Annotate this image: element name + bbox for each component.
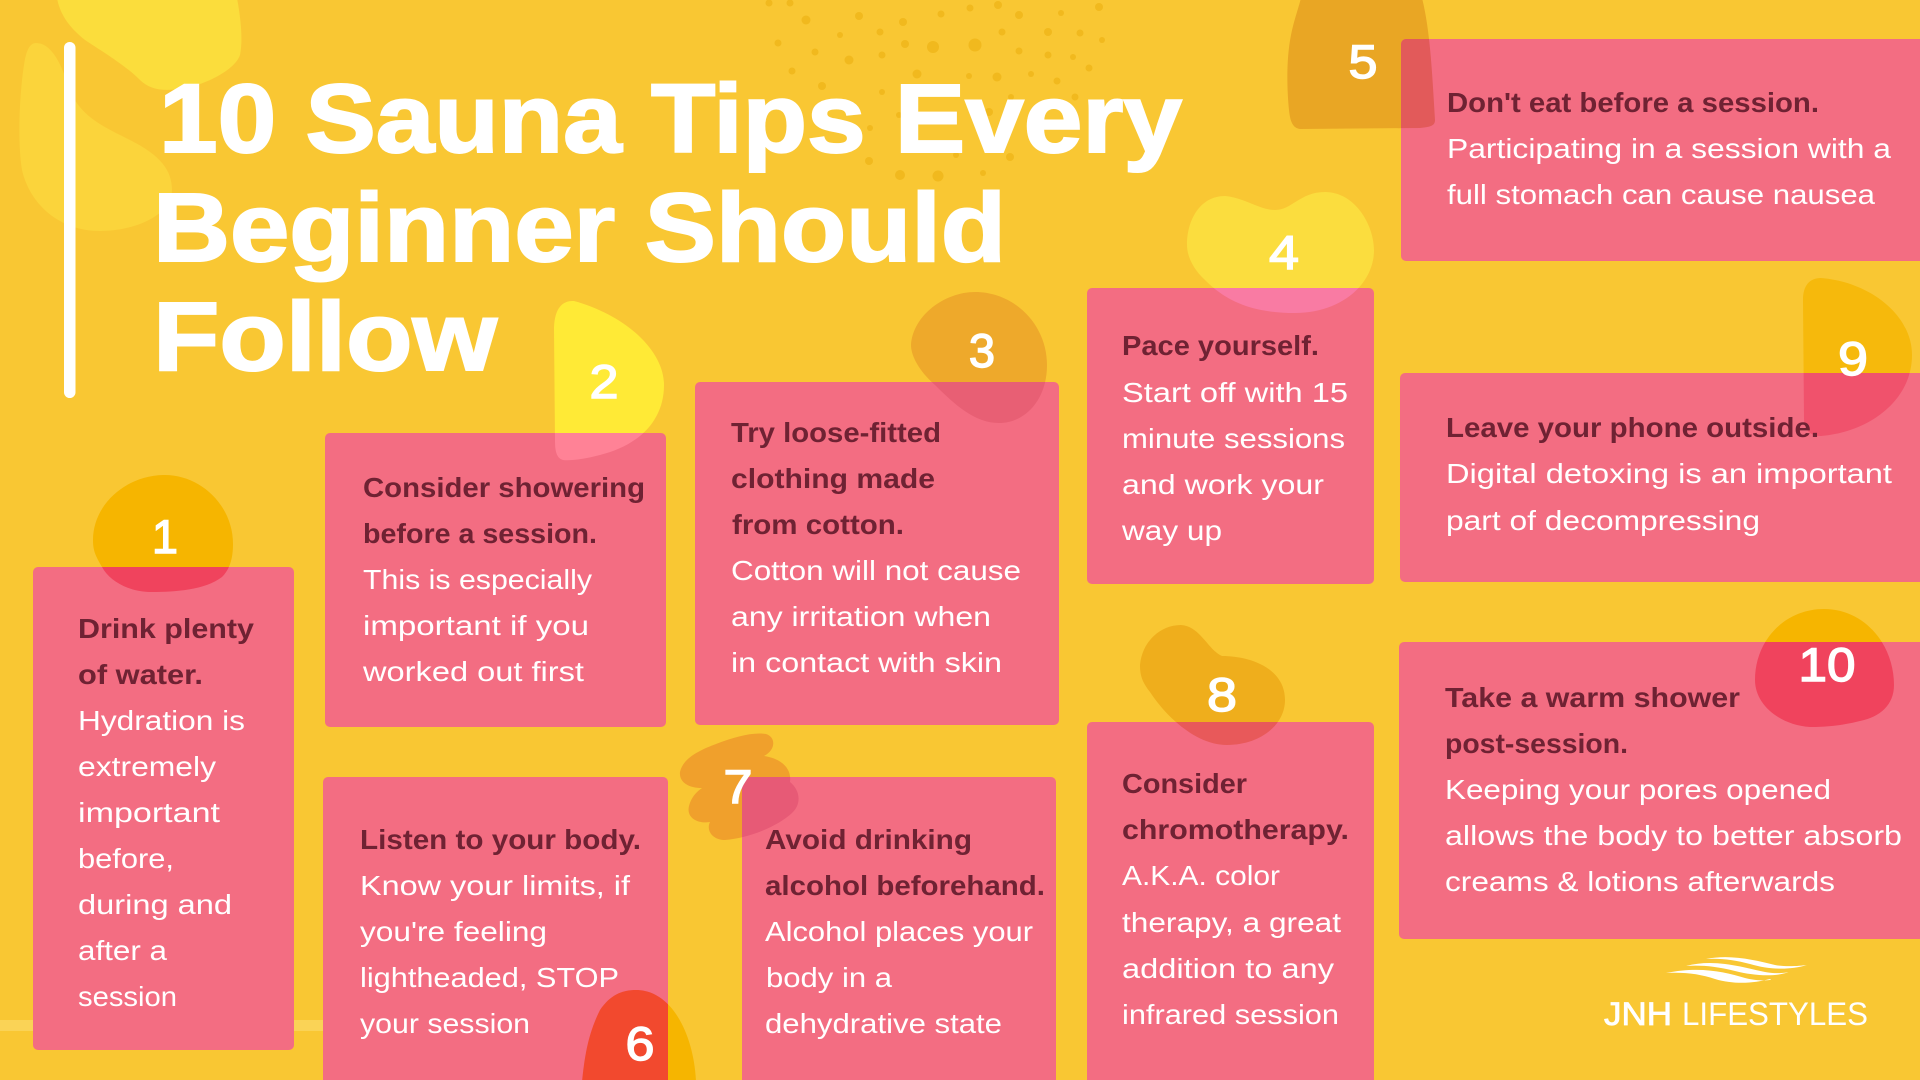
- panel: tip 8: therapy, a great: [1122, 907, 1341, 938]
- panel: tip 3: in contact with skin: [731, 647, 1002, 678]
- panel: tip 3: from cotton.: [732, 509, 904, 540]
- panel: tip 3: Try loose-fitted: [731, 417, 941, 448]
- panel: tip 5: full stomach can cause nausea: [1447, 179, 1875, 210]
- panel: tip 2: worked out first: [362, 656, 584, 687]
- panel: tip 1: [33, 475, 294, 1050]
- panel: tip 3: Cotton will not cause: [731, 555, 1021, 586]
- panel: tip 2: important if you: [363, 610, 589, 641]
- panel: tip 4: minute sessions: [1122, 423, 1345, 454]
- panel: tip 6: [323, 777, 696, 1080]
- panel: tip 4: [1087, 192, 1374, 584]
- panel: tip 1: important: [78, 797, 220, 828]
- panel: tip 9: Digital detoxing is an important: [1446, 458, 1892, 489]
- title: 10 Sauna Tips Every: [159, 64, 1182, 173]
- panel: tip 8: A.K.A. color: [1122, 860, 1280, 891]
- panel: tip 10: post-session.: [1445, 728, 1628, 759]
- panel: tip 9: 9: [1838, 332, 1868, 385]
- panel: tip 5: 5: [1348, 35, 1378, 88]
- decorative blob: top left yellow: [57, 0, 241, 90]
- logo: JNH Lifestyles: LIFESTYLES: [1682, 996, 1868, 1032]
- panel: tip 1: after a: [78, 935, 167, 966]
- panel: tip 3: clothing made: [731, 463, 935, 494]
- panel: tip 2: before a session.: [363, 518, 597, 549]
- panel: tip 1: of water.: [78, 659, 203, 690]
- decorative dot pattern: [766, 0, 1105, 182]
- panel: tip 6: Know your limits, if: [360, 870, 630, 901]
- panel: tip 4: Start off with 15: [1122, 377, 1348, 408]
- panel: tip 10: [1399, 609, 1920, 939]
- panel: tip 5: Participating in a session with a: [1447, 133, 1891, 164]
- panel: tip 8: infrared session: [1122, 999, 1339, 1030]
- panel: tip 10: allows the body to better absorb: [1445, 820, 1902, 851]
- panel: tip 1: Hydration is: [78, 705, 245, 736]
- panel: tip 7: Alcohol places your: [765, 916, 1033, 947]
- panel: tip 8: Consider: [1122, 768, 1247, 799]
- panel: tip 9: [1400, 278, 1920, 582]
- panel: tip 10: Keeping your pores opened: [1445, 774, 1831, 805]
- panel: tip 2: 2: [590, 355, 618, 408]
- panel: tip 7: Avoid drinking: [765, 824, 972, 855]
- panel: tip 1: 1: [152, 510, 178, 563]
- panel: tip 7: [680, 734, 1056, 1080]
- panel: tip 1: before,: [78, 843, 174, 874]
- title: Beginner Should: [153, 173, 1006, 282]
- panel: tip 1: session: [78, 981, 177, 1012]
- panel: tip 6: you're feeling: [360, 916, 547, 947]
- panel: tip 8: addition to any: [1122, 953, 1334, 984]
- panel: tip 5: [1287, 0, 1920, 261]
- panel: tip 4: and work your: [1122, 469, 1324, 500]
- panel: tip 4: way up: [1121, 515, 1222, 546]
- logo: JNH Lifestyles: [1604, 957, 1868, 1032]
- panel: tip 8: chromotherapy.: [1122, 814, 1349, 845]
- panel: tip 3: any irritation when: [731, 601, 991, 632]
- panel: tip 2: Consider showering: [363, 472, 645, 503]
- panel: tip 7: 7: [724, 760, 752, 813]
- logo: JNH Lifestyles: JNH: [1604, 996, 1672, 1032]
- title accent bar: [64, 42, 76, 398]
- panel: tip 8: [1087, 625, 1374, 1080]
- panel: tip 2: [325, 301, 666, 727]
- panel: tip 1: extremely: [78, 751, 216, 782]
- decorative blob: left pale yellow: [19, 43, 172, 231]
- panel: tip 9: part of decompressing: [1446, 505, 1760, 536]
- panel: tip 6: 6: [626, 1017, 654, 1070]
- panel: tip 8: 8: [1207, 668, 1237, 721]
- decorative band behind cards: [0, 1020, 330, 1031]
- panel: tip 2: This is especially: [363, 564, 592, 595]
- panel: tip 6: your session: [360, 1008, 530, 1039]
- panel: tip 7: dehydrative state: [765, 1008, 1002, 1039]
- panel: tip 7: body in a: [766, 962, 892, 993]
- panel: tip 10: 10: [1798, 638, 1856, 691]
- panel: tip 9: Leave your phone outside.: [1446, 412, 1819, 443]
- panel: tip 3: [695, 292, 1059, 725]
- panel: tip 10: creams & lotions afterwards: [1445, 866, 1835, 897]
- panel: tip 1: during and: [78, 889, 232, 920]
- panel: tip 3: 3: [969, 324, 995, 377]
- panel: tip 7: alcohol beforehand.: [765, 870, 1045, 901]
- panel: tip 6: lightheaded, STOP: [360, 962, 619, 993]
- panel: tip 4: 4: [1269, 226, 1299, 279]
- panel: tip 1: Drink plenty: [78, 613, 254, 644]
- title: Follow: [153, 282, 498, 391]
- panel: tip 4: Pace yourself.: [1122, 330, 1319, 361]
- panel: tip 5: Don't eat before a session.: [1447, 87, 1819, 118]
- title: [153, 64, 1182, 391]
- panel: tip 10: Take a warm shower: [1445, 682, 1740, 713]
- panel: tip 6: Listen to your body.: [360, 824, 641, 855]
